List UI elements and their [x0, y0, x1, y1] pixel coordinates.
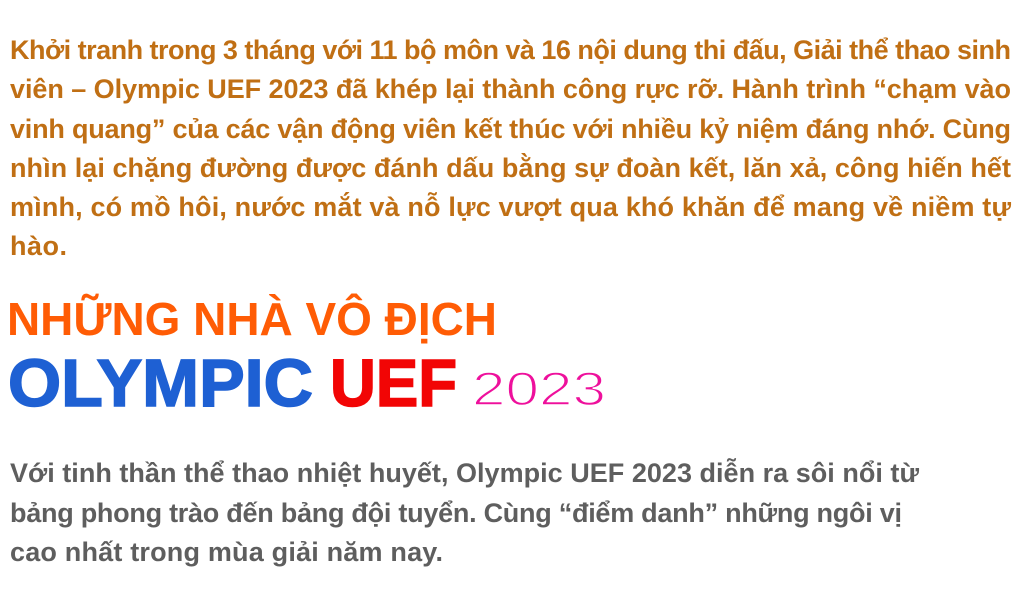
heading: Những nhà vô địch Olympic UEF 2023: 2023 [472, 362, 606, 415]
text block: intro paragraph: hào. [10, 231, 67, 261]
text block: intro paragraph: Khởi tranh trong 3 tháng với 11 bộ môn và 16 nội dung thi đấu, Giải thể thao sinh [10, 35, 1011, 65]
heading: Những nhà vô địch Olympic UEF 2023: UEF [330, 346, 457, 421]
text block: closing paragraph: cao nhất trong mùa giải năm nay. [10, 537, 443, 567]
text block: intro paragraph: viên – Olympic UEF 2023 đã khép lại thành công rực rỡ. Hành trình “chạm vào [10, 74, 1011, 104]
text block: intro paragraph [10, 35, 1011, 261]
heading: Những nhà vô địch Olympic UEF 2023: NHỮNG NHÀ VÔ ĐỊCH [7, 293, 497, 345]
text block: closing paragraph: bảng phong trào đến bảng đội tuyển. Cùng “điểm danh” những ngôi vị [10, 498, 902, 528]
heading: Những nhà vô địch Olympic UEF 2023 [7, 293, 606, 421]
text block: closing paragraph [10, 457, 919, 567]
text block: closing paragraph: Với tinh thần thể thao nhiệt huyết, Olympic UEF 2023 diễn ra sôi nổi từ [10, 457, 919, 488]
heading: Những nhà vô địch Olympic UEF 2023: OLYMPIC [8, 346, 313, 421]
text block: intro paragraph: mình, có mồ hôi, nước mắt và nỗ lực vượt qua khó khăn để mang về niềm tự [10, 191, 1011, 222]
text block: intro paragraph: vinh quang” của các vận động viên kết thúc với nhiều kỷ niệm đáng nhớ. Cùng [10, 114, 1011, 144]
text block: intro paragraph: nhìn lại chặng đường được đánh dấu bằng sự đoàn kết, lăn xả, công hiến hết [10, 152, 1011, 183]
